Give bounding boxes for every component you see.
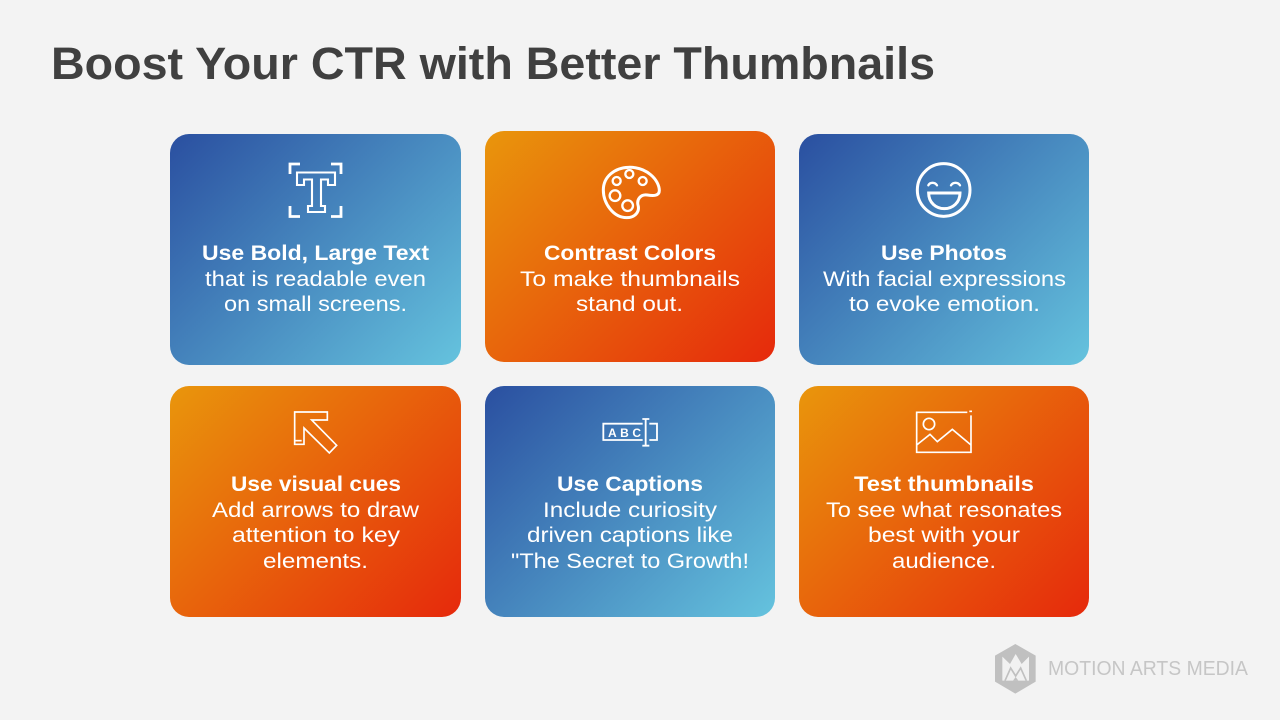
body text: that is readable even: [205, 267, 426, 291]
panel: test thumbnails: [799, 386, 1089, 617]
logo: Motion Arts Media: [995, 644, 1249, 694]
body text: [212, 498, 420, 573]
body text: [205, 267, 426, 316]
wordmark: MOTION ARTS MEDIA: [1048, 658, 1249, 680]
panel: captions: [485, 386, 775, 617]
icon: text T: [290, 164, 341, 216]
heading: Use visual cues: [231, 472, 401, 496]
body text: Include curiosity: [543, 498, 717, 522]
icon: arrow: [295, 412, 337, 453]
heading: Use Bold, Large Text: [202, 241, 429, 265]
body text: With facial expressions: [823, 267, 1066, 291]
body text: "The Secret to Growth!: [511, 549, 749, 573]
icon: image: [917, 411, 972, 452]
heading: Use Captions: [557, 472, 703, 496]
icon: hexagon crown: [995, 644, 1036, 694]
body text: To see what resonates: [826, 498, 1062, 522]
panel: photos: [799, 134, 1089, 365]
body text: [826, 498, 1062, 573]
icon: palette: [603, 167, 659, 218]
heading: Contrast Colors: [544, 241, 716, 265]
panel: bold text: [170, 134, 461, 365]
panel: visual cues: [170, 386, 461, 617]
body text: [520, 267, 740, 316]
body text: elements.: [263, 549, 368, 573]
body text: best with your: [868, 523, 1020, 547]
body text: [511, 498, 749, 573]
body text: To make thumbnails: [520, 267, 740, 291]
icon: caption box: [603, 419, 657, 446]
body text: driven captions like: [527, 523, 733, 547]
body text: attention to key: [232, 523, 400, 547]
body text: stand out.: [576, 292, 683, 316]
body text: [823, 267, 1066, 316]
body text: audience.: [892, 549, 996, 573]
icon: caption box: ABC: [608, 426, 641, 440]
body text: on small screens.: [224, 292, 407, 316]
icon: laughing face: [917, 164, 970, 216]
panel: contrast colors: [485, 131, 775, 362]
body text: to evoke emotion.: [849, 292, 1040, 316]
heading: Use Photos: [881, 241, 1007, 265]
title: Boost Your CTR with Better Thumbnails: [51, 38, 935, 89]
heading: Test thumbnails: [854, 472, 1034, 496]
body text: Add arrows to draw: [212, 498, 420, 522]
